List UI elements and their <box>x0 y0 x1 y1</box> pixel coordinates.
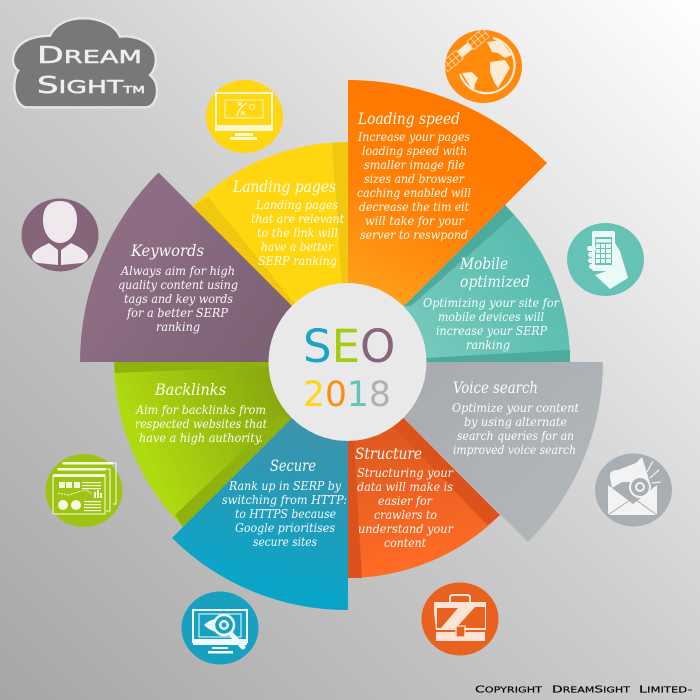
heading: Keywords <box>130 242 204 260</box>
body text: decrease the tim eit <box>359 199 469 214</box>
body text: Google prioritises <box>235 520 335 535</box>
body text: server to reswpond <box>360 227 468 242</box>
body text: will take for your <box>365 213 465 228</box>
body text: have a high authority. <box>139 430 263 445</box>
logo: DreamSight cloud <box>13 18 157 107</box>
body text: data will make is <box>357 479 453 494</box>
wedge shade <box>404 205 570 362</box>
body text: for a better SERP <box>126 305 228 320</box>
heading: Loading speed <box>357 110 460 128</box>
wedge <box>348 362 603 542</box>
icon: analytics dashboard <box>46 454 122 527</box>
body text: Optimize your content <box>452 400 579 415</box>
body text: mobile devices will <box>438 309 544 324</box>
heading: Landing pages <box>232 178 336 196</box>
body text: search queries for an <box>457 428 574 443</box>
body text: to the link will <box>257 225 338 240</box>
body text: tags and key words <box>124 291 233 306</box>
body text: Optimizing your site for <box>423 295 560 310</box>
icon: envelope and megaphone <box>595 454 672 526</box>
body text <box>357 129 471 242</box>
center badge: SEO 2018 <box>268 283 426 441</box>
body text: Rank up in SERP by <box>228 478 342 493</box>
body text: loading speed with <box>362 143 467 158</box>
body text: SERP ranking <box>258 253 337 268</box>
body text <box>222 478 347 549</box>
body text: to HTTPS because <box>235 506 336 521</box>
year 2018: 2018 <box>303 375 391 415</box>
icon: businessman avatar <box>22 198 98 272</box>
panel: secure <box>172 362 348 610</box>
copyright line: L IMITED ™ <box>639 684 693 696</box>
copyright line <box>475 684 693 696</box>
body text: easier for <box>378 493 433 508</box>
panel: keywords <box>80 172 348 362</box>
heading: Voice search <box>453 379 538 397</box>
icon: hand holding phone <box>567 223 644 296</box>
icon: globe and satellite <box>441 28 522 103</box>
body text <box>357 465 454 550</box>
body text: smaller image file <box>364 157 465 172</box>
body text: ranking <box>466 337 510 352</box>
wedge shade <box>193 142 348 309</box>
panel: mobile optimized <box>348 205 570 362</box>
copyright line: D REAM S IGHT <box>552 684 630 696</box>
body text <box>251 197 344 268</box>
body text: crawlers to <box>374 507 437 522</box>
icon: briefcase <box>422 582 498 656</box>
copyright line: C OPYRIGHT <box>475 684 542 696</box>
body text: Always aim for high <box>120 263 235 278</box>
panel: loading speed <box>348 80 547 362</box>
heading: Structure <box>355 445 422 463</box>
wedge shade <box>348 418 500 578</box>
body text: understand your <box>358 521 454 536</box>
SEO title: SEO <box>303 320 395 373</box>
logo cloud shape <box>13 18 157 107</box>
body text: increase your SERP <box>436 323 547 338</box>
body text: sizes and browser <box>364 171 465 186</box>
wedge shade <box>114 362 291 527</box>
body text: Landing pages <box>255 197 338 212</box>
wedge <box>348 362 500 578</box>
heading: Mobile <box>459 255 508 273</box>
body text <box>118 263 238 334</box>
logo word Sight: S IGHT TM <box>37 73 145 99</box>
panel: backlinks <box>114 362 348 527</box>
panel: structure <box>348 362 500 578</box>
body text: that are relevant <box>251 211 344 226</box>
body text: Increase your pages <box>357 129 470 144</box>
center circle <box>268 283 426 441</box>
body text: by using alternate <box>464 414 567 429</box>
wedge <box>172 362 348 610</box>
body text <box>452 400 579 457</box>
body text: quality content using <box>118 277 238 292</box>
heading: optimized <box>460 273 530 291</box>
wedge <box>348 80 547 362</box>
heading: Secure <box>270 457 316 475</box>
heading <box>459 255 530 291</box>
body text: content <box>384 535 426 550</box>
body text <box>423 295 560 352</box>
wedge <box>80 172 348 362</box>
body text: secure sites <box>253 534 317 549</box>
logo word Dream: D REAM <box>37 43 142 69</box>
panel: voice search <box>348 362 603 542</box>
body text: caching enabled will <box>357 185 471 200</box>
wedge <box>348 205 570 362</box>
icon: magnifier over monitor <box>182 592 258 664</box>
panel: landing pages <box>192 142 348 362</box>
body text: switching from HTTP: <box>222 492 347 507</box>
wedge <box>114 362 348 527</box>
icon: monitor with strategy play <box>206 80 283 153</box>
body text: have a better <box>261 239 334 254</box>
wedge <box>192 142 348 362</box>
body text: Aim for backlinks from <box>135 402 266 417</box>
body text: respected websites that <box>135 416 267 431</box>
heading: Backlinks <box>154 381 226 399</box>
body text: improved voice search <box>453 442 576 457</box>
body text <box>135 402 267 445</box>
body text: ranking <box>156 319 200 334</box>
body text: Structuring your <box>357 465 454 480</box>
